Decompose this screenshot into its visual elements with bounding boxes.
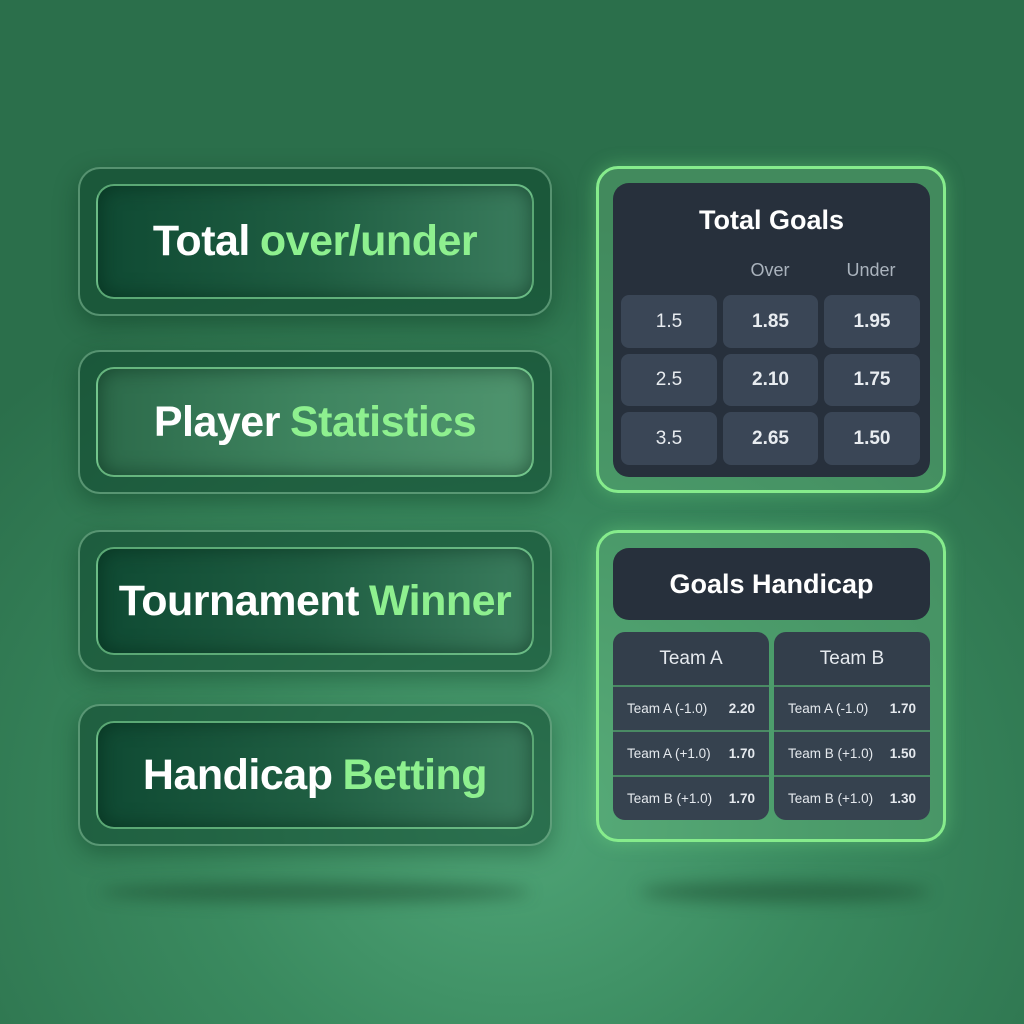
table: Team B column: 1.30 — [890, 791, 916, 806]
table: Team A column: Team A — [659, 648, 723, 668]
button: Tournament Winner — [78, 530, 552, 672]
panel: Goals Handicap — [596, 530, 946, 842]
column headers: Over — [750, 260, 790, 280]
button: Player Statistics — [78, 350, 552, 494]
odds grid: 2.65 — [752, 428, 789, 448]
odds grid: 1.50 — [854, 428, 890, 448]
table: Team B column: 1.50 — [890, 746, 916, 761]
odds grid: 1.85 — [752, 310, 789, 332]
button: Player Statistics: Statistics — [290, 398, 476, 446]
odds grid: 1.95 — [854, 310, 890, 332]
odds grid: 1.75 — [854, 369, 890, 390]
button: Handicap Betting — [78, 704, 552, 846]
odds grid: 1.5 — [656, 310, 682, 332]
button: Tournament Winner: Tournament — [119, 576, 359, 624]
table: Team B column — [774, 632, 930, 820]
table: Team A column: Team B (+1.0) — [627, 791, 712, 806]
button: Player Statistics: Player — [154, 398, 280, 446]
odds grid — [621, 295, 920, 465]
button: Total over/under: Total — [153, 217, 250, 265]
table: Team A column: Team A (-1.0) — [627, 701, 707, 716]
odds grid: 3.5 — [656, 428, 682, 448]
table: Team A column: 1.70 — [729, 746, 755, 761]
column headers — [750, 260, 896, 280]
button: Handicap Betting: Handicap — [143, 750, 332, 798]
button: Total over/under: over/under — [260, 217, 477, 265]
table: Team B column: Team B (+1.0) — [788, 791, 873, 806]
table: Team B column: Team B — [820, 648, 884, 668]
button: Tournament Winner: Winner — [369, 576, 511, 624]
heading: Total Goals: Total Goals — [699, 205, 844, 235]
table: Team B column: Team A (-1.0) — [788, 701, 868, 716]
table: Team A column — [613, 632, 769, 820]
button: Handicap Betting: Betting — [342, 750, 487, 798]
heading: Goals Handicap: Goals Handicap — [669, 568, 874, 598]
table: Team B column: 1.70 — [890, 701, 916, 716]
table: Team A column: Team A (+1.0) — [627, 746, 711, 761]
table: Team B column: Team B (+1.0) — [788, 746, 873, 761]
odds grid: 2.5 — [656, 369, 682, 390]
heading: Goals Handicap — [613, 548, 930, 620]
odds grid: 2.10 — [752, 369, 789, 390]
panel: Total Goals — [596, 166, 946, 493]
column headers: Under — [846, 260, 896, 280]
button: Total over/under — [78, 167, 552, 316]
table: Team A column: 1.70 — [729, 791, 755, 806]
table: Team A column: 2.20 — [729, 701, 755, 716]
